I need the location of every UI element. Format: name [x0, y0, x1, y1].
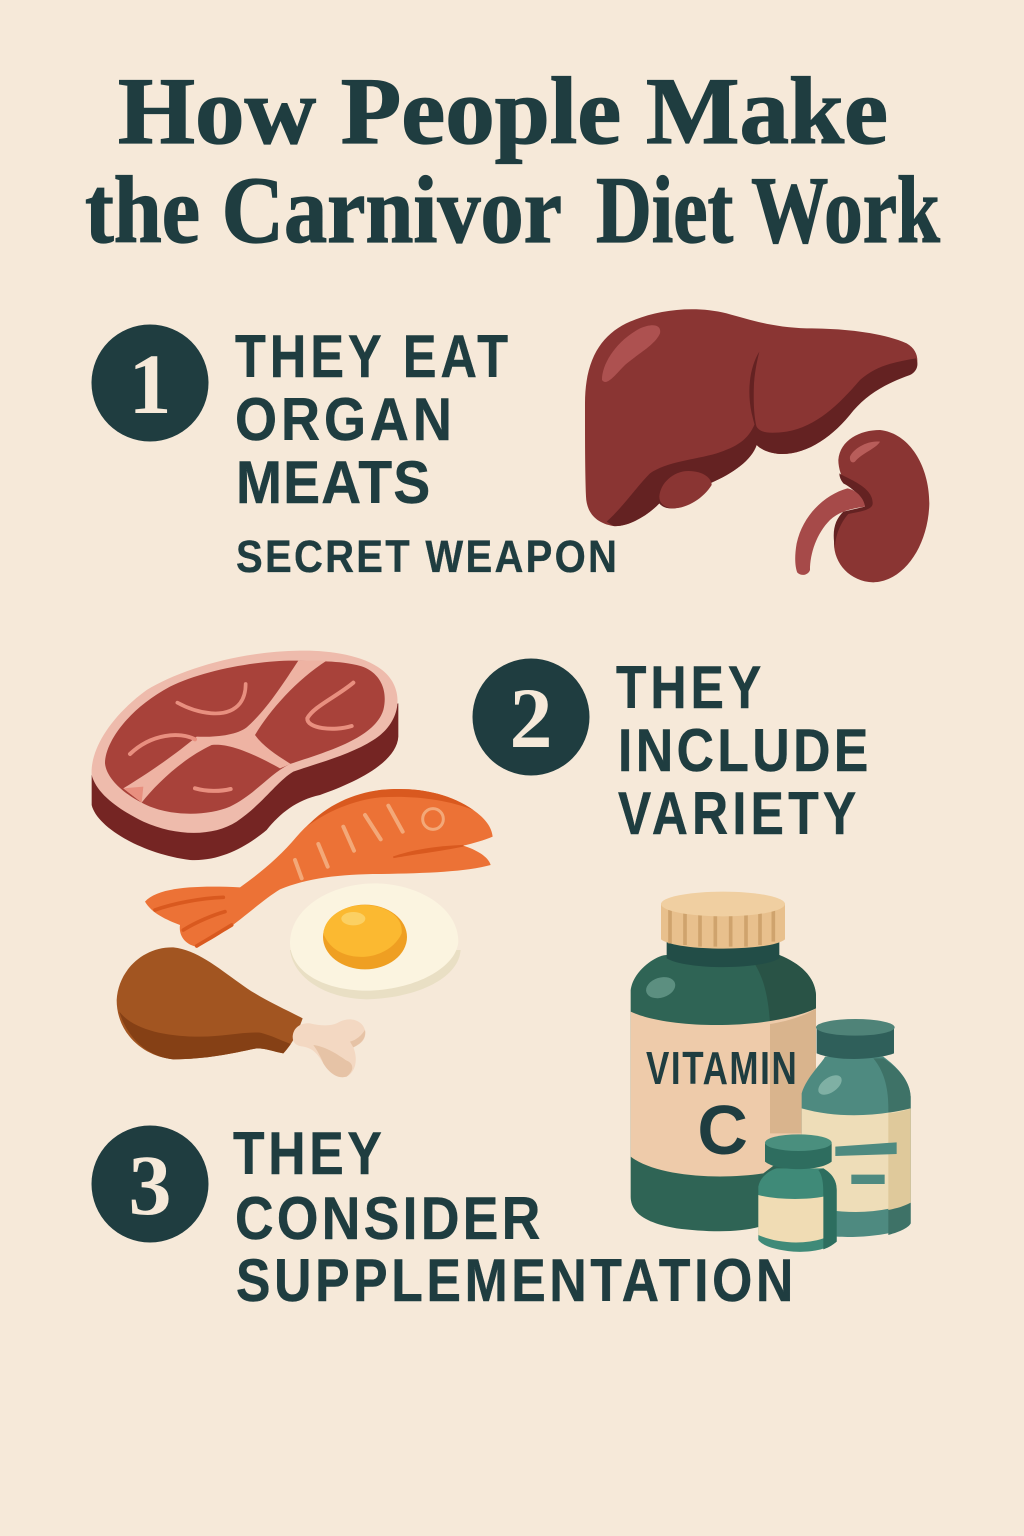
step 1 subheading: SECRET WEAPON — [236, 532, 617, 583]
title: Diet Work — [596, 157, 940, 263]
step 1 heading — [235, 323, 508, 517]
icon: vitamin c bottle — [631, 892, 816, 1231]
step 3 heading — [233, 1119, 793, 1314]
step 2 heading: VARIETY — [618, 780, 856, 847]
step 2 heading: INCLUDE — [618, 716, 868, 784]
step 1 heading: THEY EAT — [235, 323, 508, 390]
step 2 heading: THEY — [616, 654, 761, 721]
icon: chicken drumstick — [117, 947, 365, 1077]
icon: vitamin c bottle: VITAMIN — [646, 1042, 797, 1094]
step 3 number badge — [92, 1126, 208, 1242]
step 3 heading: THEY — [233, 1119, 382, 1187]
title: the Carnivor — [85, 157, 562, 263]
step 2 number badge — [472, 658, 590, 776]
step 1 number badge — [92, 324, 208, 442]
icon: kidney — [795, 430, 929, 582]
title — [85, 58, 940, 263]
icon: vitamin c bottle: C — [697, 1091, 748, 1169]
icon: fried egg — [290, 883, 461, 999]
step 3 heading: CONSIDER — [235, 1186, 540, 1253]
icon: liver — [585, 309, 917, 526]
step 2 heading — [616, 654, 868, 847]
icon: small bottle — [758, 1134, 837, 1252]
step 3 heading: SUPPLEMENTATION — [236, 1246, 793, 1314]
title: How People Make — [118, 58, 888, 164]
step 1 number badge: 1 — [128, 336, 172, 432]
icon: fish — [145, 789, 493, 947]
icon: medium bottle — [802, 1019, 911, 1237]
step 3 number badge: 3 — [128, 1137, 172, 1233]
step 2 number badge: 2 — [510, 670, 552, 766]
step 1 heading: MEATS — [236, 450, 430, 517]
step 1 heading: ORGAN — [235, 386, 452, 454]
icon: steak — [92, 651, 398, 860]
